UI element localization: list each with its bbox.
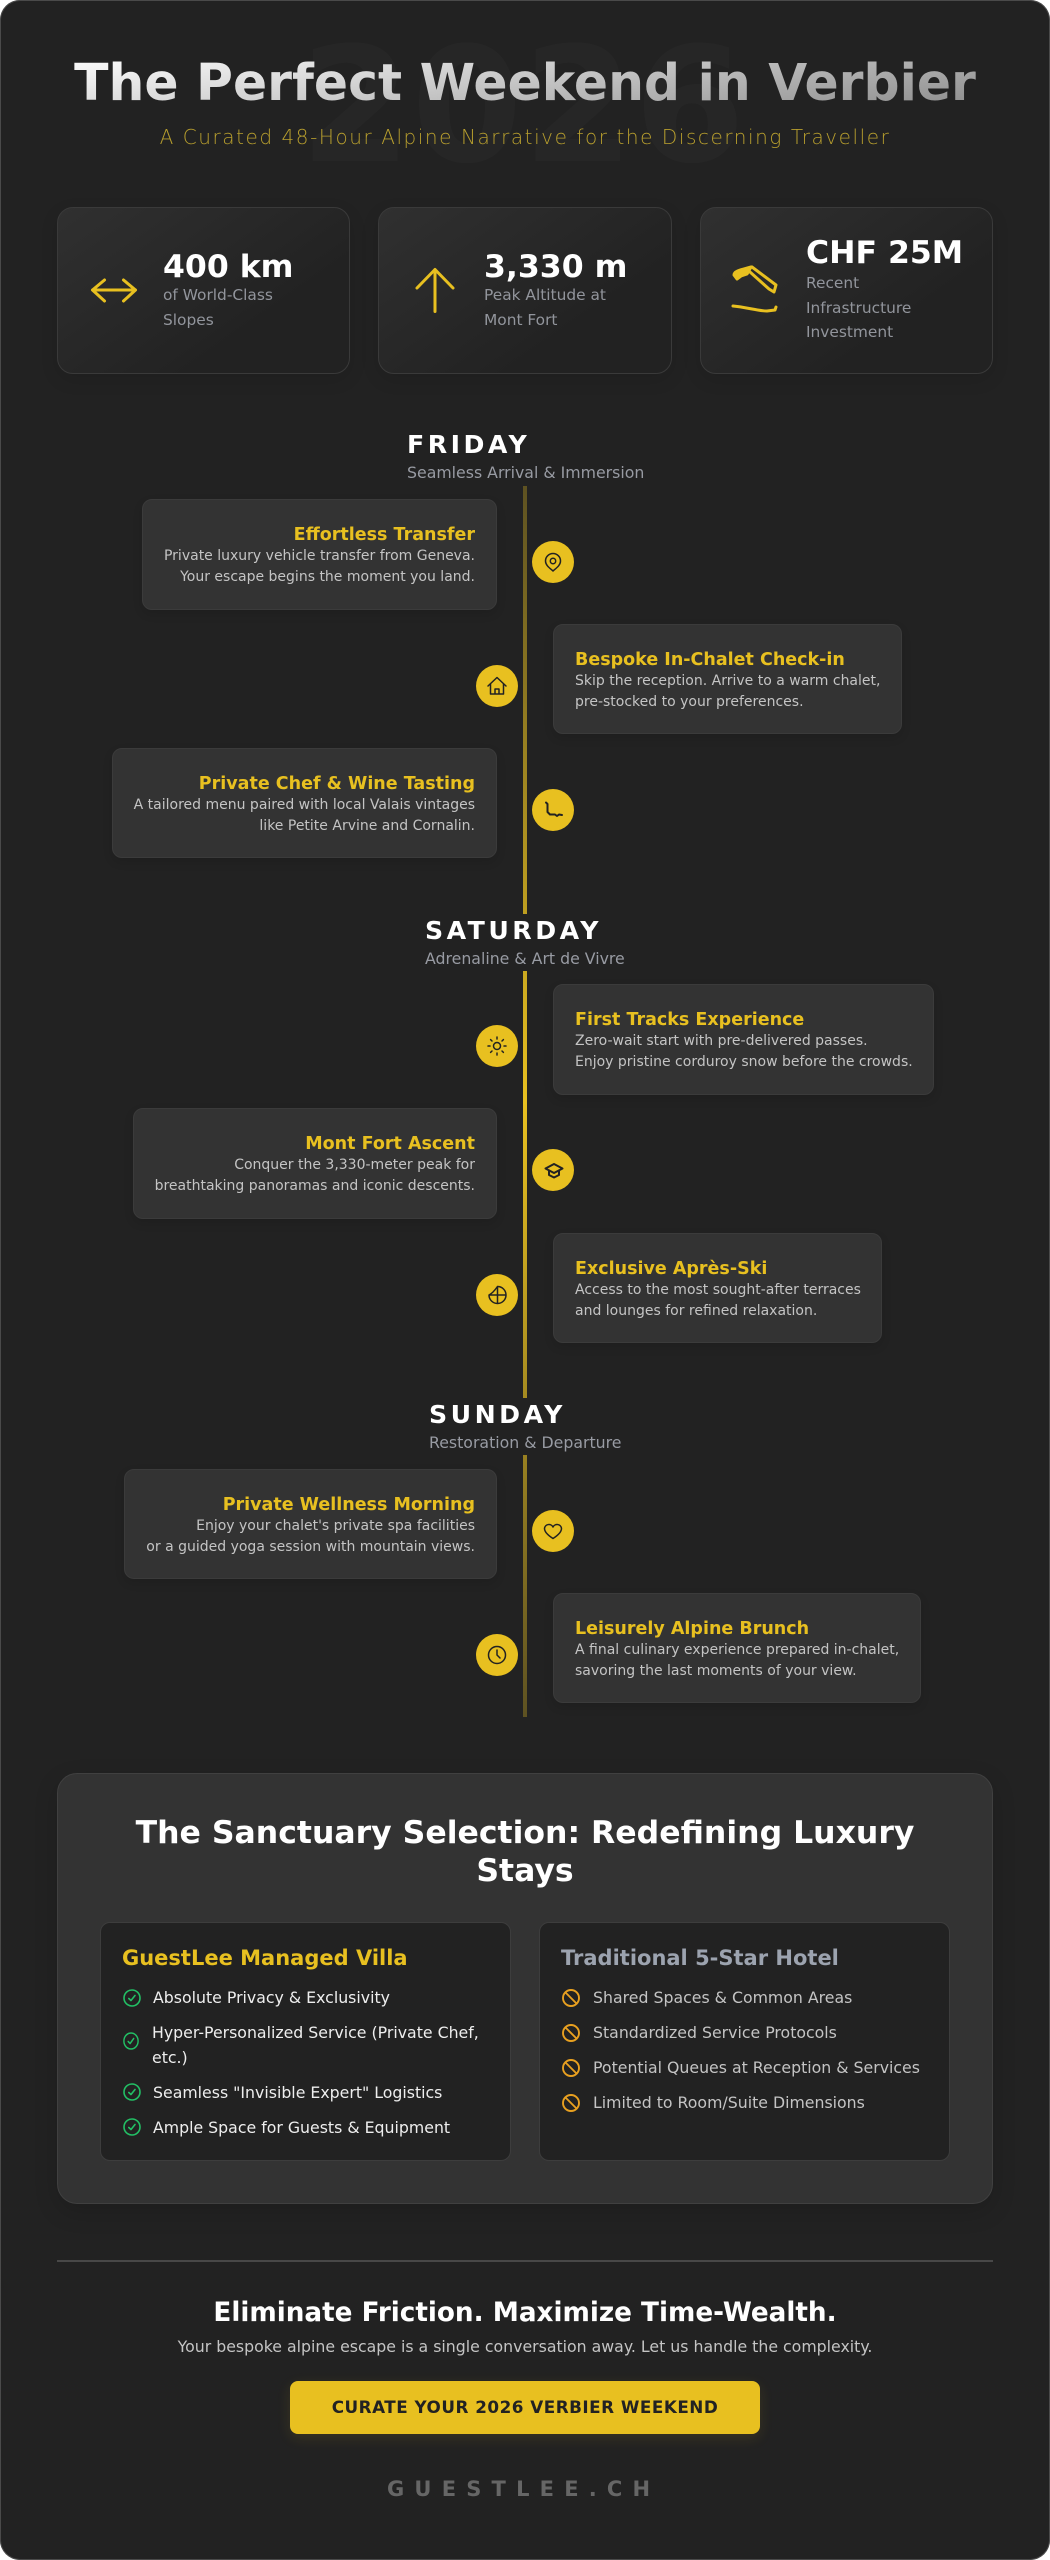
icon: utensils squiggle [532,789,574,831]
panel: sanctuary selection [57,1773,993,2204]
title: The Perfect Weekend in Verbier [74,53,976,112]
panel: GuestLee villa [100,1922,511,2161]
label [806,274,911,341]
watermark: 2026: 2026 [300,12,745,199]
label: Peak Altitude at [484,286,606,304]
label: Infrastructure [806,299,911,317]
label: Mont Fort [484,311,557,329]
event card: Mont Fort Ascent: Conquer the 3,330-meter peak for [234,1157,475,1173]
event card: Alpine Brunch: savoring the last moments of your view. [575,1663,857,1679]
event card: Alpine Brunch: A final culinary experience prepared in-chalet, [575,1642,899,1658]
CTA text: Your bespoke alpine escape is a single conversation away. Let us handle the complexity. [178,2337,872,2356]
day heading: Friday: Seamless Arrival & Immersion [407,463,644,482]
event card: First Tracks: Zero-wait start with pre-delivered passes. [575,1033,868,1049]
event card: Bespoke In-Chalet Check-in: pre-stocked to your preferences. [575,694,804,710]
event card: Mont Fort Ascent [133,1108,497,1219]
event card: Private Chef [112,748,497,858]
event card: Bespoke In-Chalet Check-in: Skip the reception. Arrive to a warm chalet, [575,673,880,689]
event card: Effortless Transfer [142,499,497,610]
item: etc.) [152,2048,188,2067]
day heading: Saturday: Adrenaline & Art de Vivre [425,949,625,968]
event card: Effortless Transfer: Effortless Transfer [294,525,475,545]
heading: sanctuary selection: Stays [476,1853,574,1889]
label: of World-Class [163,286,273,304]
event card: Private Wellness: or a guided yoga session with mountain views. [146,1539,475,1555]
event card: Mont Fort Ascent: breathtaking panoramas and iconic descents. [155,1178,475,1194]
CTA button [290,2381,760,2434]
icon: pie chart [476,1274,518,1316]
day heading: Sunday: Restoration & Departure [429,1433,621,1452]
day heading: Sunday: SUNDAY [429,1400,566,1429]
icon: clock [476,1634,518,1676]
event card: Exclusive Apres-Ski: Exclusive Après-Ski [575,1259,767,1279]
icon: infrastructure [732,265,778,312]
label [484,286,606,329]
item [562,1988,920,2112]
heading: sanctuary selection: The Sanctuary Selection: Redefining Luxury [136,1815,914,1851]
icon: map pin [532,541,574,583]
CTA button: CURATE YOUR 2026 VERBIER WEEKEND [332,2397,718,2417]
timeline line [523,486,527,1717]
stat card: slopes [57,207,350,374]
label [163,286,273,329]
day heading: Friday: FRIDAY [407,430,530,459]
item: Ample Space for Guests & Equipment [153,2118,450,2137]
footer brand: GUESTLEE.CH [387,2477,660,2501]
event card: Effortless Transfer: Private luxury vehicle transfer from Geneva. [164,548,475,564]
heading: sanctuary selection [136,1815,914,1889]
event card: Bespoke In-Chalet Check-in [553,624,902,734]
label: Recent [806,274,859,292]
event card: Private Chef: A tailored menu paired with local Valais vintages [134,797,475,813]
item: Limited to Room/Suite Dimensions [593,2093,865,2112]
icon: academic cap [532,1149,574,1191]
heading: Traditional 5-Star Hotel [561,1946,839,1970]
day heading: Saturday [425,914,625,971]
icon: horizontal arrows [90,278,138,303]
item: Seamless "Invisible Expert" Logistics [153,2083,442,2102]
event card: Alpine Brunch: Leisurely Alpine Brunch [575,1619,809,1639]
event card: Effortless Transfer: Your escape begins the moment you land. [180,569,475,585]
event card: Private Chef: like Petite Arvine and Cornalin. [259,818,475,834]
item: Hyper-Personalized Service (Private Chef, [152,2023,479,2042]
stat card: altitude [378,207,672,374]
event card: First Tracks: First Tracks Experience [575,1010,804,1030]
event card: Private Wellness [124,1469,497,1579]
heading: GuestLee Managed Villa [122,1946,408,1970]
event card: Private Chef: Private Chef & Wine Tasting [199,774,475,794]
event card: Exclusive Apres-Ski: and lounges for refined relaxation. [575,1303,817,1319]
event card: Bespoke In-Chalet Check-in: Bespoke In-Chalet Check-in [575,650,845,670]
icon: up arrow [415,268,455,313]
day heading: Saturday: SATURDAY [425,916,602,945]
icon: home [476,665,518,707]
event card: Private Wellness: Enjoy your chalet's private spa facilities [196,1518,475,1534]
event card: First Tracks: Enjoy pristine corduroy snow before the crowds. [575,1054,913,1070]
label: Slopes [163,311,214,329]
event card: Exclusive Apres-Ski [553,1233,882,1343]
day heading: Friday [407,428,644,486]
item: Shared Spaces & Common Areas [593,1988,852,2007]
value: CHF 25M [806,234,963,270]
event card: Exclusive Apres-Ski: Access to the most sought-after terraces [575,1282,861,1298]
icon: sun [476,1025,518,1067]
value: 3,330 m [484,248,627,284]
item: Absolute Privacy & Exclusivity [153,1988,390,2007]
event card: First Tracks [553,984,934,1095]
event card: Private Wellness: Private Wellness Morning [223,1495,475,1515]
event card: Mont Fort Ascent: Mont Fort Ascent [305,1134,475,1154]
day heading: Sunday [429,1398,621,1455]
item [123,1988,479,2137]
stat card: investment [700,207,993,374]
panel: traditional hotel [539,1922,950,2161]
event card: Alpine Brunch [553,1593,921,1703]
value: 400 km [163,248,294,284]
CTA heading: Eliminate Friction. Maximize Time-Wealth. [213,2298,837,2328]
item: Potential Queues at Reception & Services [593,2058,920,2077]
item: Standardized Service Protocols [593,2023,837,2042]
label: Investment [806,323,893,341]
subtitle: A Curated 48-Hour Alpine Narrative for the Discerning Traveller [160,125,890,149]
icon: heart [532,1510,574,1552]
